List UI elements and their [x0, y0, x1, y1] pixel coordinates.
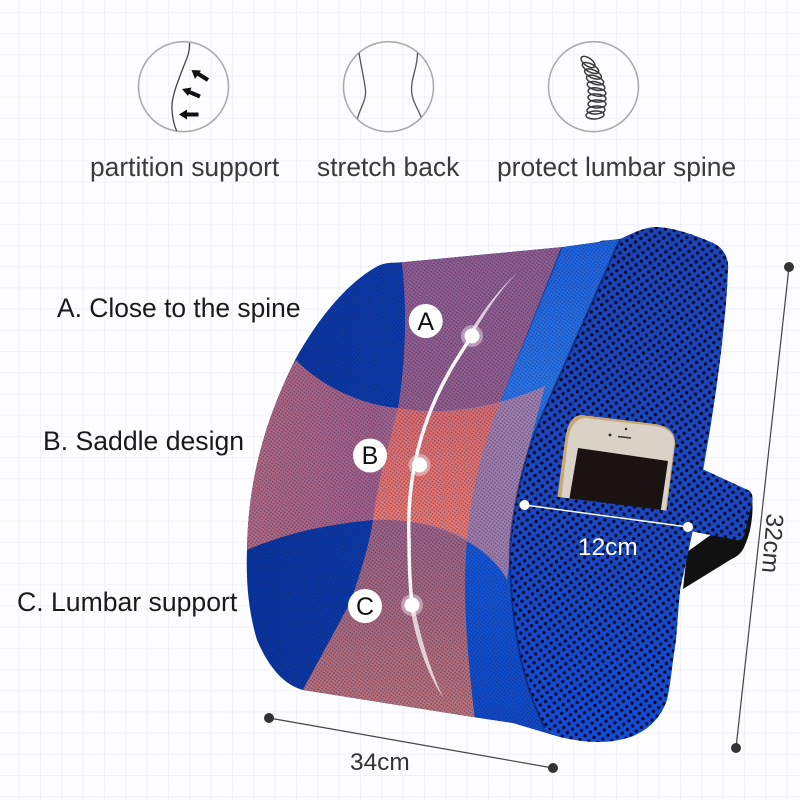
- badge A: A: [417, 308, 434, 336]
- caption: protect lumbar spine: protect lumbar spine: [497, 152, 736, 182]
- spine line: [409, 273, 517, 697]
- icon: stretch back: [344, 42, 434, 132]
- label: C. Lumbar support: C. Lumbar support: [17, 587, 238, 617]
- centre salmon intersection: [373, 402, 500, 540]
- point markers on spine: [401, 325, 483, 616]
- dimension: 32cm height: [731, 262, 794, 753]
- lumbar cushion illustration: [230, 227, 753, 750]
- strap: blue mesh loop: [690, 468, 753, 540]
- dimension: 34cm width: [264, 713, 558, 776]
- strap: black elastic: [683, 498, 753, 589]
- badge C: C: [356, 593, 374, 621]
- bright blue side band: [465, 230, 630, 745]
- caption: stretch back: stretch back: [317, 152, 460, 182]
- icon: protect lumbar spine: [548, 42, 638, 132]
- dimension: 12cm pocket width: 12cm: [578, 534, 638, 561]
- vertical pink band: [300, 243, 563, 720]
- horizontal pink band: [235, 360, 545, 580]
- pocket flap: [515, 493, 693, 715]
- badge A: [409, 304, 443, 338]
- caption: partition support: partition support: [90, 152, 280, 182]
- cushion side panel: dark mesh: [480, 227, 728, 742]
- cushion front face: [246, 239, 620, 737]
- phone in pocket: [557, 415, 675, 522]
- dimension: 34cm width: 34cm: [350, 749, 410, 776]
- icon: partition support: [138, 42, 228, 132]
- label: B. Saddle design: B. Saddle design: [43, 426, 244, 456]
- seam shadow between front face and side panel: [510, 239, 620, 728]
- badge B: B: [362, 442, 378, 470]
- dimension: 12cm pocket width: [520, 500, 693, 561]
- dimension: 32cm height: 32cm: [756, 512, 788, 574]
- badge B: [353, 438, 387, 472]
- badge C: [348, 589, 382, 623]
- label: A. Close to the spine: A. Close to the spine: [57, 293, 301, 323]
